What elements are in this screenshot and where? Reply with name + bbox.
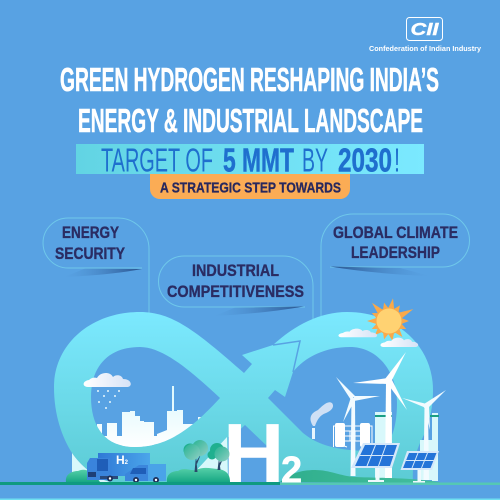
truck: H2	[116, 453, 129, 467]
callout: global climate leadership	[321, 214, 470, 335]
solar panel small	[400, 451, 439, 482]
city skyline	[97, 386, 201, 447]
tree right	[208, 443, 230, 470]
hill	[280, 470, 443, 483]
callout: energy security: SECURITY	[55, 244, 126, 263]
subtitle pill: A STRATEGIC STEP TOWARDS	[160, 180, 341, 196]
wind turbine right	[402, 390, 446, 480]
rain cloud	[84, 373, 131, 409]
callout: global climate leadership: LEADERSHIP	[351, 243, 440, 262]
callout: industrial competitiveness: COMPETITIVENESS	[167, 282, 304, 301]
H2 letters: H	[223, 407, 284, 500]
wind turbine left	[336, 377, 380, 476]
callout: industrial competitiveness: INDUSTRIAL	[192, 261, 279, 280]
subtitle pill	[150, 174, 350, 199]
solar panel large	[351, 443, 400, 482]
target banner	[76, 142, 424, 178]
ground line	[0, 482, 500, 485]
callout: industrial competitiveness	[158, 256, 313, 335]
H2 letters: 2	[281, 450, 302, 492]
target banner: BY	[302, 142, 328, 178]
infinity arrow	[54, 312, 433, 482]
logo: CII: CII	[410, 19, 440, 39]
sun	[367, 298, 415, 341]
logo: CII	[369, 18, 481, 53]
logo: CII: Confederation of Indian Industry	[369, 46, 481, 53]
bushes	[66, 468, 230, 482]
callout: energy security	[43, 218, 149, 320]
truck	[87, 453, 150, 482]
target banner: 2030	[338, 142, 392, 178]
sun clouds	[339, 329, 418, 347]
wind turbine centre	[353, 352, 407, 478]
tree left	[184, 440, 208, 472]
callout: global climate leadership: GLOBAL CLIMATE	[333, 223, 458, 242]
title	[60, 61, 439, 139]
van	[125, 464, 166, 483]
callout: energy security: ENERGY	[62, 223, 120, 242]
target banner: !	[394, 142, 400, 178]
target banner: 5 MMT	[223, 142, 294, 178]
target banner: TARGET OF	[101, 142, 213, 178]
bottom edge strip	[0, 498, 500, 500]
factory and towers	[311, 402, 439, 482]
